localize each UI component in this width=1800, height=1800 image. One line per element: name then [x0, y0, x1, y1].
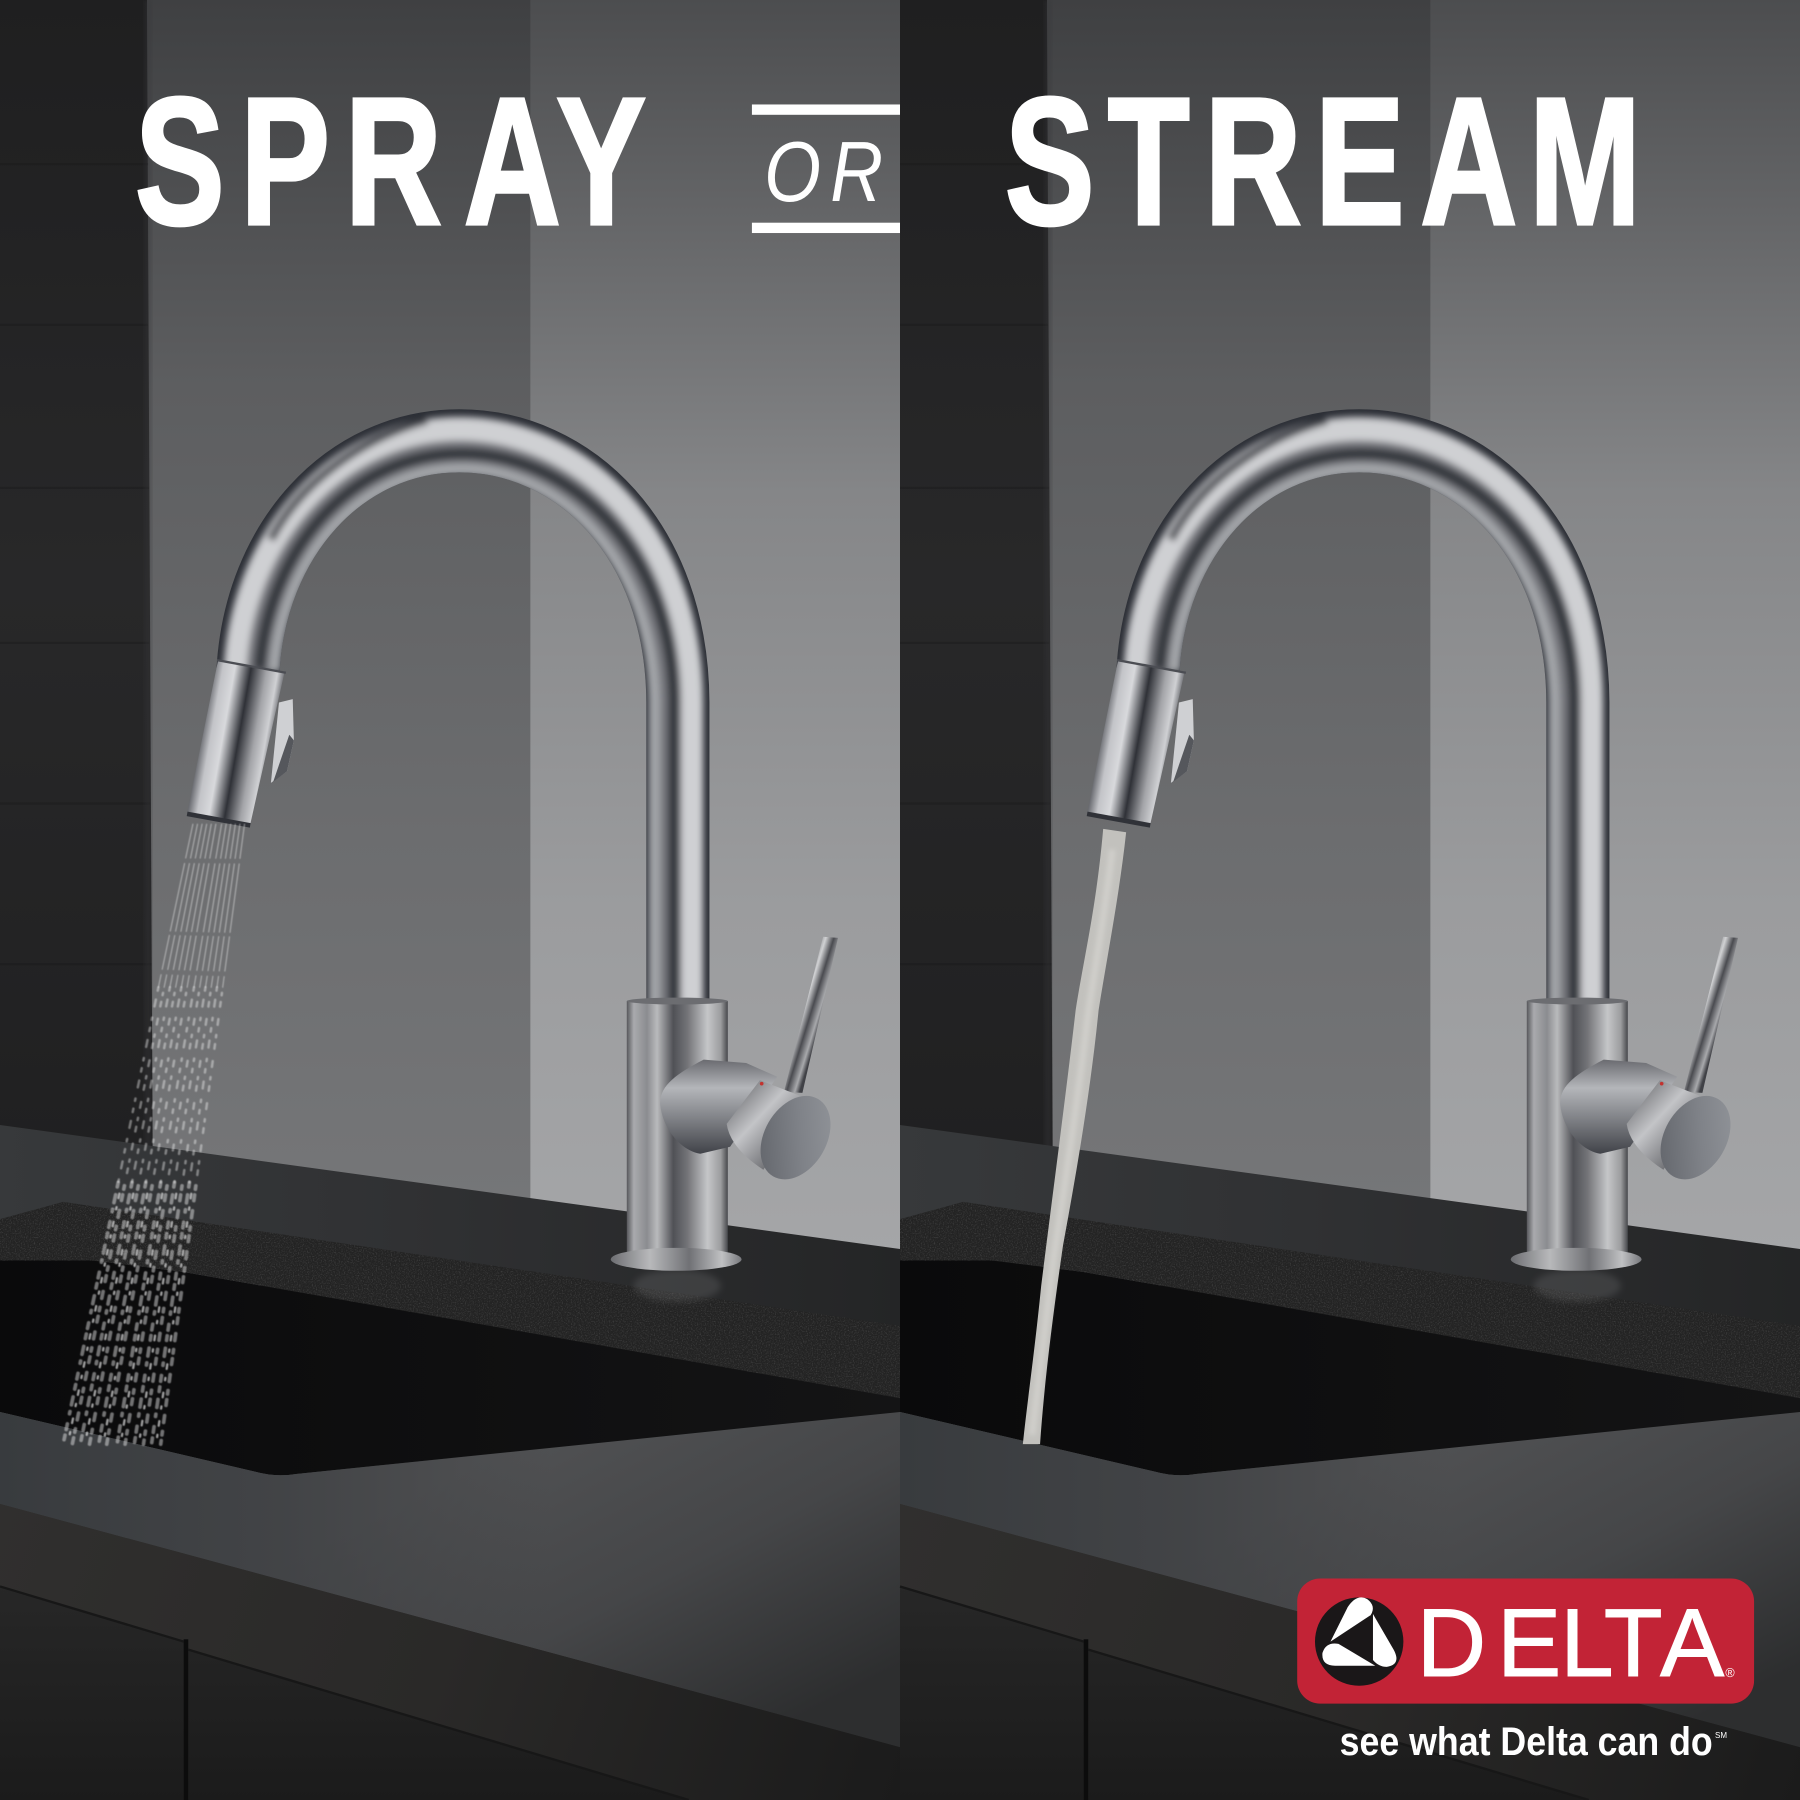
- registered mark: ®: [1725, 1666, 1735, 1680]
- OR bottom rule: [752, 223, 900, 233]
- panel: stream scene with kitchen and faucet: [900, 0, 1800, 1800]
- spray head: [187, 660, 286, 825]
- faucet button: [271, 699, 294, 783]
- Delta logo: [1297, 1578, 1754, 1704]
- wall: middle grey panel: [147, 0, 533, 1286]
- OR word: OR: [764, 124, 883, 219]
- faucet reflection on counter: [634, 1270, 721, 1302]
- counter top surface: [0, 1125, 900, 1337]
- hot indicator dot: [760, 1082, 764, 1086]
- handle lever: [784, 937, 838, 1093]
- counter edge face: [0, 1202, 900, 1398]
- front counter surface: [0, 1412, 900, 1747]
- tagline: see what Delta can do: [1340, 1719, 1713, 1764]
- logo red badge: [1297, 1578, 1754, 1704]
- wall: dark tile column: [0, 0, 153, 1159]
- faucet base rim: [627, 998, 728, 1004]
- water: spray droplets: [63, 824, 245, 1444]
- front counter face: [0, 1504, 900, 1800]
- handle disc: [746, 1083, 845, 1192]
- handle collar: [660, 1060, 777, 1154]
- OR divider: [752, 104, 900, 233]
- title: SPRAY: SPRAY: [135, 60, 646, 263]
- logo circle mark: [1315, 1597, 1403, 1686]
- wall: right lighter panel: [530, 0, 900, 1297]
- logo wordmark: DELTA: [1417, 1590, 1725, 1697]
- service mark: SM: [1715, 1731, 1727, 1740]
- faucet base cylinder: [627, 1001, 728, 1256]
- sink basin: [0, 1260, 900, 1475]
- OR top rule: [752, 104, 900, 115]
- title: STREAM: STREAM: [1005, 60, 1641, 263]
- water: solid stream: [1023, 829, 1126, 1444]
- faucet spout and stem: [235, 420, 692, 1010]
- faucet flange: [611, 1248, 742, 1271]
- handle knob: [727, 1080, 810, 1170]
- cabinet doors: [0, 1586, 689, 1800]
- faucet: [187, 420, 845, 1271]
- panel: spray scene with kitchen and faucet: [0, 0, 900, 1800]
